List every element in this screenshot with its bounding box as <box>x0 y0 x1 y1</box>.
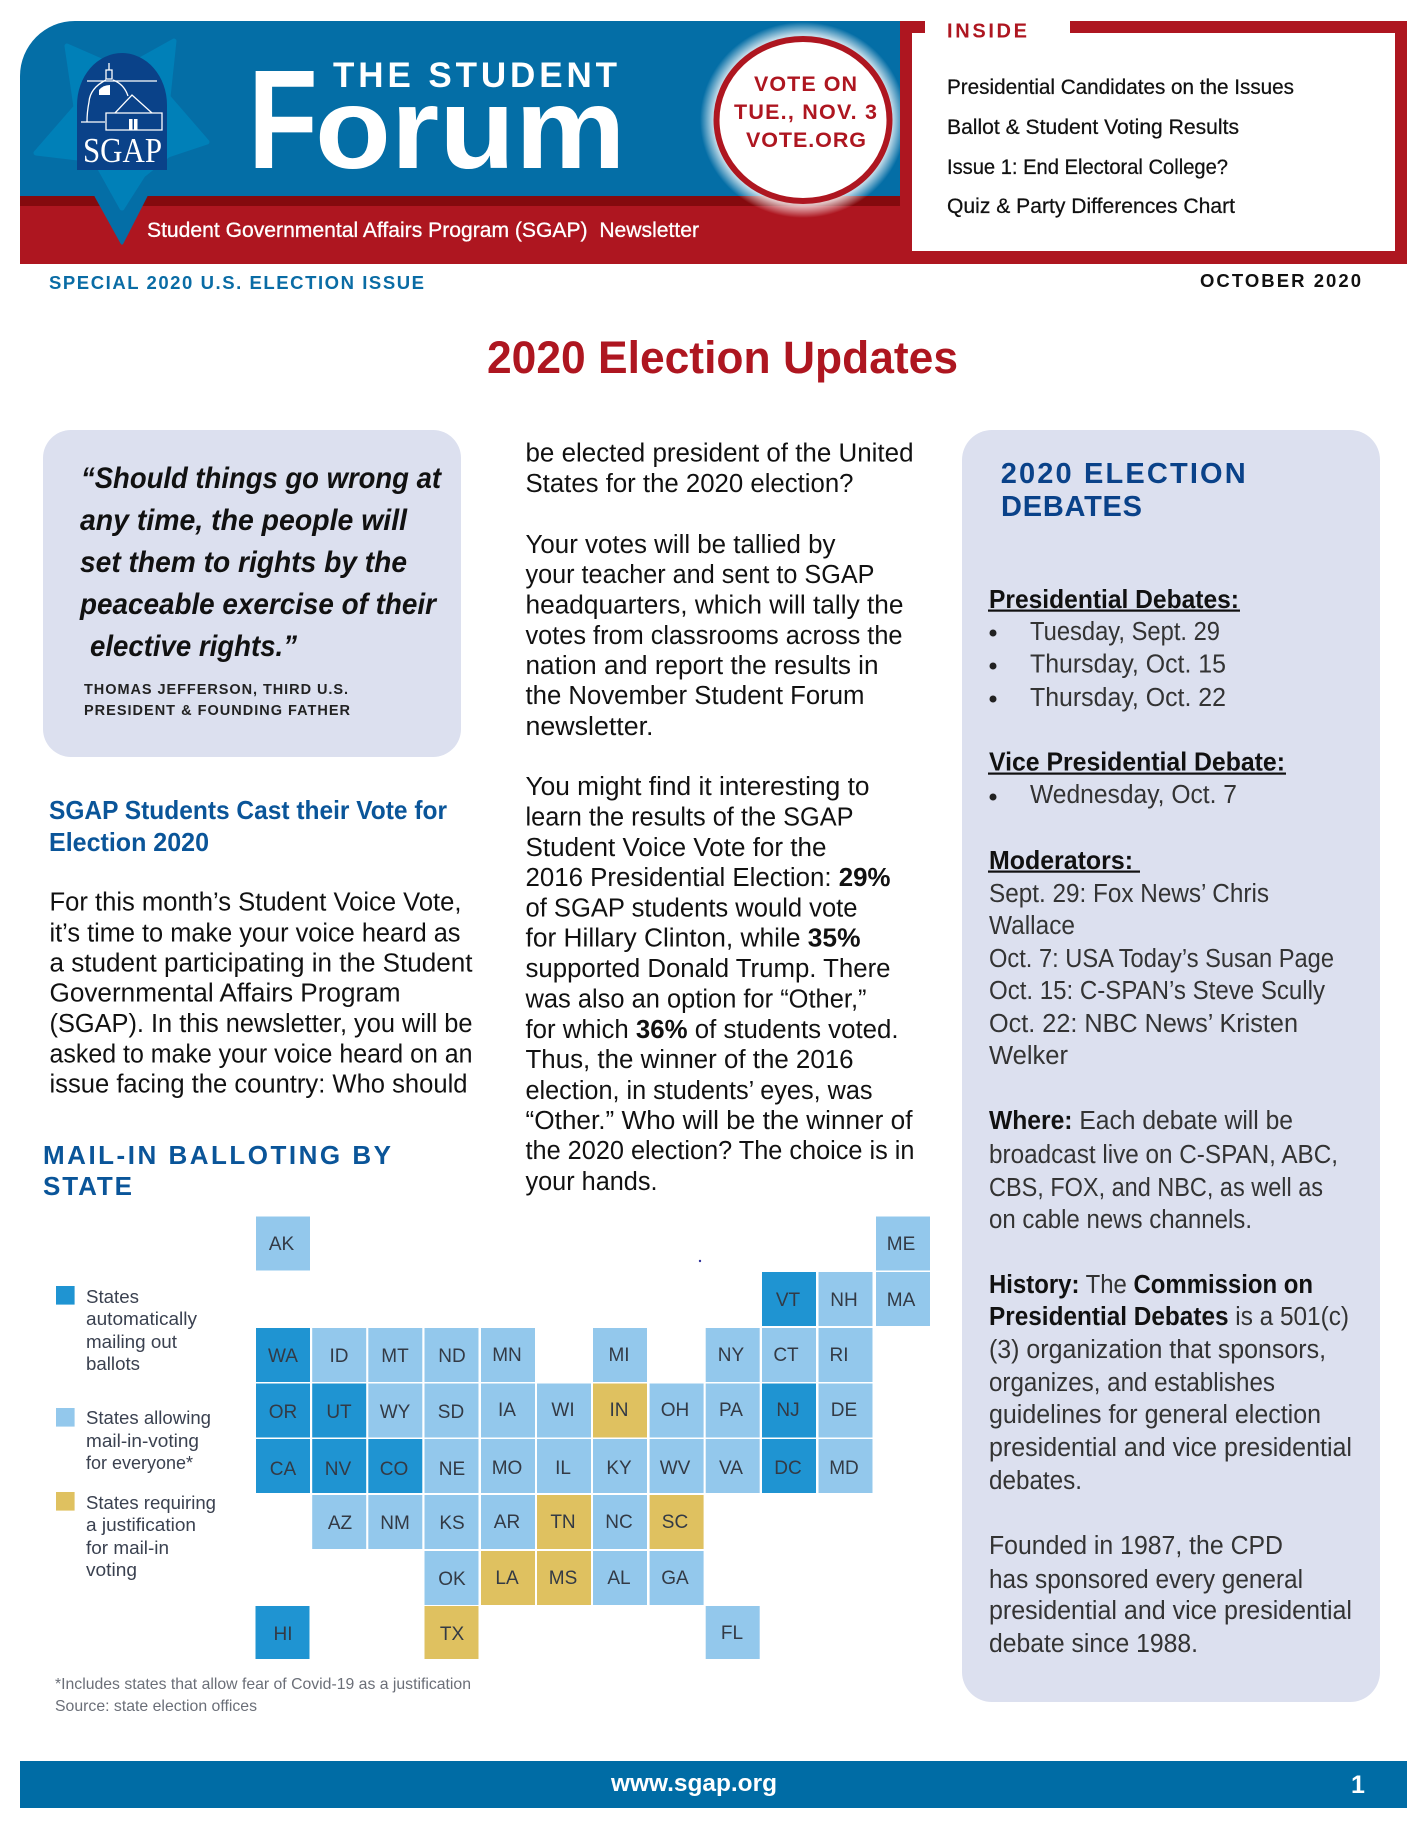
debates heading <box>1001 458 1246 523</box>
chart: state tile map: NY <box>718 1345 745 1366</box>
website: www.sgap.org <box>610 1770 777 1797</box>
history: guidelines for general election <box>989 1401 1321 1429</box>
presidential debates list: Thursday, Oct. 15 <box>1030 651 1226 679</box>
text block: middle column <box>525 440 914 1196</box>
chart: state tile map: MD <box>829 1458 859 1479</box>
chart: state tile map: WY <box>380 1402 411 1423</box>
chart: state tile map: CT <box>773 1345 799 1366</box>
chart: state tile map: MN <box>492 1345 522 1366</box>
quote attribution: PRESIDENT & FOUNDING FATHER <box>84 703 351 719</box>
text block: middle column: be elected president of the United <box>526 440 914 468</box>
chart: state tile map: NH <box>830 1290 858 1311</box>
debates heading: 2020 ELECTION <box>1001 458 1246 490</box>
newsletter name: THE STUDENT <box>333 56 617 95</box>
legend <box>56 1286 216 1580</box>
icon: SGAP capitol logo <box>77 53 167 170</box>
presidential debates list <box>988 584 1240 712</box>
chart: state tile map: TX <box>440 1624 464 1645</box>
chart: state tile map: FL <box>721 1623 743 1644</box>
legend: mail-in for everyone <box>56 1408 211 1473</box>
chart: state tile map: NV <box>325 1459 352 1480</box>
chart: state tile map: IL <box>555 1458 571 1479</box>
newsletter name <box>248 44 668 194</box>
quote text: any time, the people will <box>80 504 408 537</box>
inside heading: INSIDE <box>947 20 1027 42</box>
text block: student voice vote intro: Governmental Affairs Program <box>50 980 400 1008</box>
text block: middle column: your teacher and sent to SGAP <box>526 561 874 589</box>
chart: state tile map: NC <box>605 1512 633 1533</box>
text block: middle column: for which 36% of students voted. <box>526 1016 898 1044</box>
founding note: has sponsored every general <box>989 1566 1303 1594</box>
chart footnote <box>55 1676 471 1715</box>
chart: state tile map: WI <box>551 1400 575 1421</box>
footer bar <box>20 1761 1407 1808</box>
founding note: presidential and vice presidential <box>989 1597 1352 1625</box>
legend: justification required: for mail-in <box>86 1538 169 1558</box>
chart footnote: *Includes states that allow fear of Covid-19 as a justification <box>55 1676 471 1693</box>
legend: mail-in for everyone: States allowing <box>86 1408 211 1428</box>
chart: state tile map: VA <box>719 1458 743 1479</box>
icon: star behind logo <box>36 41 207 243</box>
chart: state tile map: GA <box>661 1568 689 1589</box>
chart: state tile map: WA <box>268 1346 298 1367</box>
text block: student voice vote intro: a student participating in the Student <box>50 950 473 978</box>
text block: middle column: the 2020 election? The choice is in <box>526 1137 914 1165</box>
history: debates. <box>989 1467 1082 1495</box>
history: History: The Commission on <box>989 1271 1313 1299</box>
text block: student voice vote intro: asked to make your voice heard on an <box>50 1041 472 1069</box>
where: CBS, FOX, and NBC, as well as <box>989 1174 1323 1202</box>
where: Where: Each debate will be <box>989 1107 1293 1135</box>
founding note: Founded in 1987, the CPD <box>989 1532 1283 1560</box>
presidential debates list: Presidential Debates: <box>989 584 1239 614</box>
panel: 2020 election debates <box>962 430 1380 1702</box>
text block: middle column: headquarters, which will tally the <box>526 592 904 620</box>
issue label: SPECIAL 2020 U.S. ELECTION ISSUE <box>49 272 424 293</box>
where: broadcast live on C-SPAN, ABC, <box>989 1141 1338 1169</box>
inside list: Quiz & Party Differences Chart <box>947 195 1235 218</box>
text block: middle column: Your votes will be tallied by <box>526 531 836 559</box>
subtitle: Student Governmental Affairs Program (SGAP) Newsletter <box>147 219 699 242</box>
badge: vote on Nov. 3: VOTE.ORG <box>746 128 866 152</box>
presidential debates list: Thursday, Oct. 22 <box>1030 684 1226 712</box>
legend: justification required <box>56 1492 216 1580</box>
chart: state tile map: DC <box>774 1458 802 1479</box>
chart: state tile map: MA <box>887 1290 916 1311</box>
text block: middle column: You might find it interesting to <box>526 773 870 801</box>
text block: middle column: of SGAP students would vote <box>526 895 858 923</box>
history <box>989 1271 1352 1495</box>
chart: state tile map: MO <box>492 1458 522 1479</box>
text block: middle column: election, in students’ eyes, was <box>526 1077 872 1105</box>
chart: state tile map: CO <box>380 1459 408 1480</box>
chart: state tile map: AR <box>494 1512 520 1533</box>
page number: 1 <box>1351 1771 1365 1799</box>
heading: mail-in balloting: MAIL-IN BALLOTING BY <box>43 1140 391 1170</box>
badge: vote on Nov. 3: VOTE ON <box>754 72 857 96</box>
panel: inside contents <box>900 20 1407 264</box>
chart: state tile map: SD <box>438 1402 464 1423</box>
chart: state tile map: IA <box>498 1400 516 1421</box>
badge: vote on Nov. 3 <box>700 22 906 218</box>
chart: state tile map: ME <box>887 1234 915 1255</box>
newsletter name: orum <box>315 65 626 193</box>
icon: SGAP capitol logo: SGAP <box>83 131 162 170</box>
text block: middle column: was also an option for “Other,” <box>525 986 866 1014</box>
chart: state tile map: TN <box>550 1512 576 1533</box>
quote text: peaceable exercise of their <box>79 588 438 621</box>
panel: Jefferson quote <box>43 430 461 757</box>
inside list: Presidential Candidates on the Issues <box>947 76 1294 99</box>
moderators: Welker <box>989 1042 1068 1070</box>
chart: state tile map: AZ <box>328 1513 353 1534</box>
chart: state tile map: CA <box>270 1459 297 1480</box>
chart: state tile map: AL <box>607 1568 631 1589</box>
vice presidential debate: Vice Presidential Debate: <box>989 747 1285 777</box>
legend: automatic mailing <box>56 1286 197 1374</box>
chart: state tile map: NE <box>439 1459 465 1480</box>
heading: student vote: SGAP Students Cast their Vote for <box>49 795 447 825</box>
text block: middle column: supported Donald Trump. There <box>526 955 890 983</box>
legend: justification required: voting <box>86 1560 137 1580</box>
text block: student voice vote intro <box>50 889 473 1099</box>
text block: middle column: for Hillary Clinton, while 35% <box>526 925 860 953</box>
vice presidential debate: Wednesday, Oct. 7 <box>1030 781 1237 809</box>
quote attribution: THOMAS JEFFERSON, THIRD U.S. <box>84 682 348 698</box>
chart: state tile map: ID <box>330 1346 348 1367</box>
presidential debates list: Tuesday, Sept. 29 <box>1030 618 1220 646</box>
quote attribution <box>84 682 351 719</box>
chart: state tile map: OH <box>661 1400 689 1421</box>
moderators: Sept. 29: Fox News’ Chris <box>989 880 1269 908</box>
text block: middle column: Student Voice Vote for the <box>526 834 826 862</box>
chart: state tile map: OR <box>269 1402 297 1423</box>
banner blue background <box>20 21 900 196</box>
text block: student voice vote intro: issue facing the country: Who should <box>50 1071 468 1099</box>
legend: mail-in for everyone: mail-in-voting <box>86 1431 199 1451</box>
text block: student voice vote intro: it’s time to make your voice heard as <box>50 920 460 948</box>
chart: state tile map: ND <box>438 1346 466 1367</box>
chart: state tile map: RI <box>830 1345 848 1366</box>
chart: state tile map <box>256 1216 930 1659</box>
text block: middle column: your hands. <box>526 1168 658 1196</box>
heading: student vote <box>49 795 447 857</box>
text block: middle column: learn the results of the SGAP <box>526 804 854 832</box>
history: organizes, and establishes <box>989 1369 1275 1397</box>
heading: mail-in balloting <box>43 1140 391 1201</box>
chart: state tile map: MS <box>549 1568 577 1589</box>
heading: mail-in balloting: STATE <box>43 1171 132 1201</box>
text block: middle column: 2016 Presidential Election: 29% <box>526 864 890 892</box>
chart: state tile map: DE <box>831 1400 857 1421</box>
history: Presidential Debates is a 501(c) <box>989 1303 1349 1331</box>
inside list: Ballot & Student Voting Results <box>947 116 1239 139</box>
legend: mail-in for everyone: for everyone* <box>86 1453 193 1473</box>
issue date: OCTOBER 2020 <box>1200 270 1361 291</box>
where <box>989 1107 1338 1234</box>
chart: state tile map: NM <box>380 1513 410 1534</box>
chart footnote: Source: state election offices <box>55 1698 257 1715</box>
moderators: Wallace <box>989 912 1075 940</box>
chart: state tile map: OK <box>438 1569 466 1590</box>
founding note <box>989 1532 1352 1658</box>
legend: justification required: a justification <box>86 1515 196 1535</box>
moderators: Oct. 7: USA Today’s Susan Page <box>989 945 1334 973</box>
chart: state tile map: IN <box>610 1400 628 1421</box>
chart: state tile map: NJ <box>776 1400 800 1421</box>
text block: middle column: votes from classrooms across the <box>526 622 902 650</box>
legend: automatic mailing: ballots <box>86 1354 140 1374</box>
chart: state tile map: SC <box>662 1512 688 1533</box>
legend: automatic mailing: mailing out <box>86 1332 177 1352</box>
chart: state tile map: LA <box>495 1568 519 1589</box>
moderators <box>988 845 1334 1070</box>
text block: student voice vote intro: For this month’s Student Voice Vote, <box>50 889 462 917</box>
text block: middle column: nation and report the results in <box>526 652 878 680</box>
chart: state tile map: HI <box>274 1624 292 1645</box>
masthead banner <box>20 21 915 264</box>
chart: state tile map: PA <box>719 1400 743 1421</box>
chart: state tile map: WV <box>660 1458 691 1479</box>
legend: automatic mailing: States <box>86 1287 139 1307</box>
moderators: Oct. 15: C-SPAN’s Steve Scully <box>989 977 1325 1005</box>
quote text <box>79 462 443 663</box>
debates heading: DEBATES <box>1001 491 1142 523</box>
legend: automatic mailing: automatically <box>86 1309 197 1329</box>
text block: middle column: the November Student Forum <box>526 682 864 710</box>
text block: middle column: newsletter. <box>526 713 654 741</box>
title: 2020 Election Updates <box>487 332 958 383</box>
text block: middle column: “Other.” Who will be the winner of <box>526 1107 913 1135</box>
history: (3) organization that sponsors, <box>989 1336 1326 1364</box>
chart: state tile map: VT <box>776 1290 801 1311</box>
quote text: “Should things go wrong at <box>81 462 443 495</box>
chart: state tile map: AK <box>269 1234 294 1255</box>
inside list <box>947 76 1294 218</box>
inside list: Issue 1: End Electoral College? <box>947 156 1228 179</box>
chart: state tile map: MT <box>381 1346 409 1367</box>
chart: state tile map: UT <box>326 1402 352 1423</box>
badge: vote on Nov. 3: TUE., NOV. 3 <box>734 100 877 124</box>
legend: justification required: States requiring <box>86 1493 216 1513</box>
chart: state tile map: KY <box>606 1458 632 1479</box>
founding note: debate since 1988. <box>989 1630 1198 1658</box>
quote text: elective rights.” <box>90 630 297 663</box>
heading: student vote: Election 2020 <box>49 827 209 857</box>
chart: state tile map: MI <box>608 1345 630 1366</box>
where: on cable news channels. <box>989 1206 1252 1234</box>
text block: middle column: States for the 2020 election? <box>526 470 854 498</box>
quote text: set them to rights by the <box>80 546 407 579</box>
text block: middle column: Thus, the winner of the 2016 <box>526 1046 854 1074</box>
moderators: Moderators: <box>989 845 1133 875</box>
chart: state tile map: KS <box>439 1513 465 1534</box>
vice presidential debate <box>988 747 1286 809</box>
moderators: Oct. 22: NBC News’ Kristen <box>989 1010 1298 1038</box>
history: presidential and vice presidential <box>989 1434 1352 1462</box>
banner red strip <box>20 196 915 264</box>
text block: student voice vote intro: (SGAP). In this newsletter, you will be <box>50 1010 472 1038</box>
